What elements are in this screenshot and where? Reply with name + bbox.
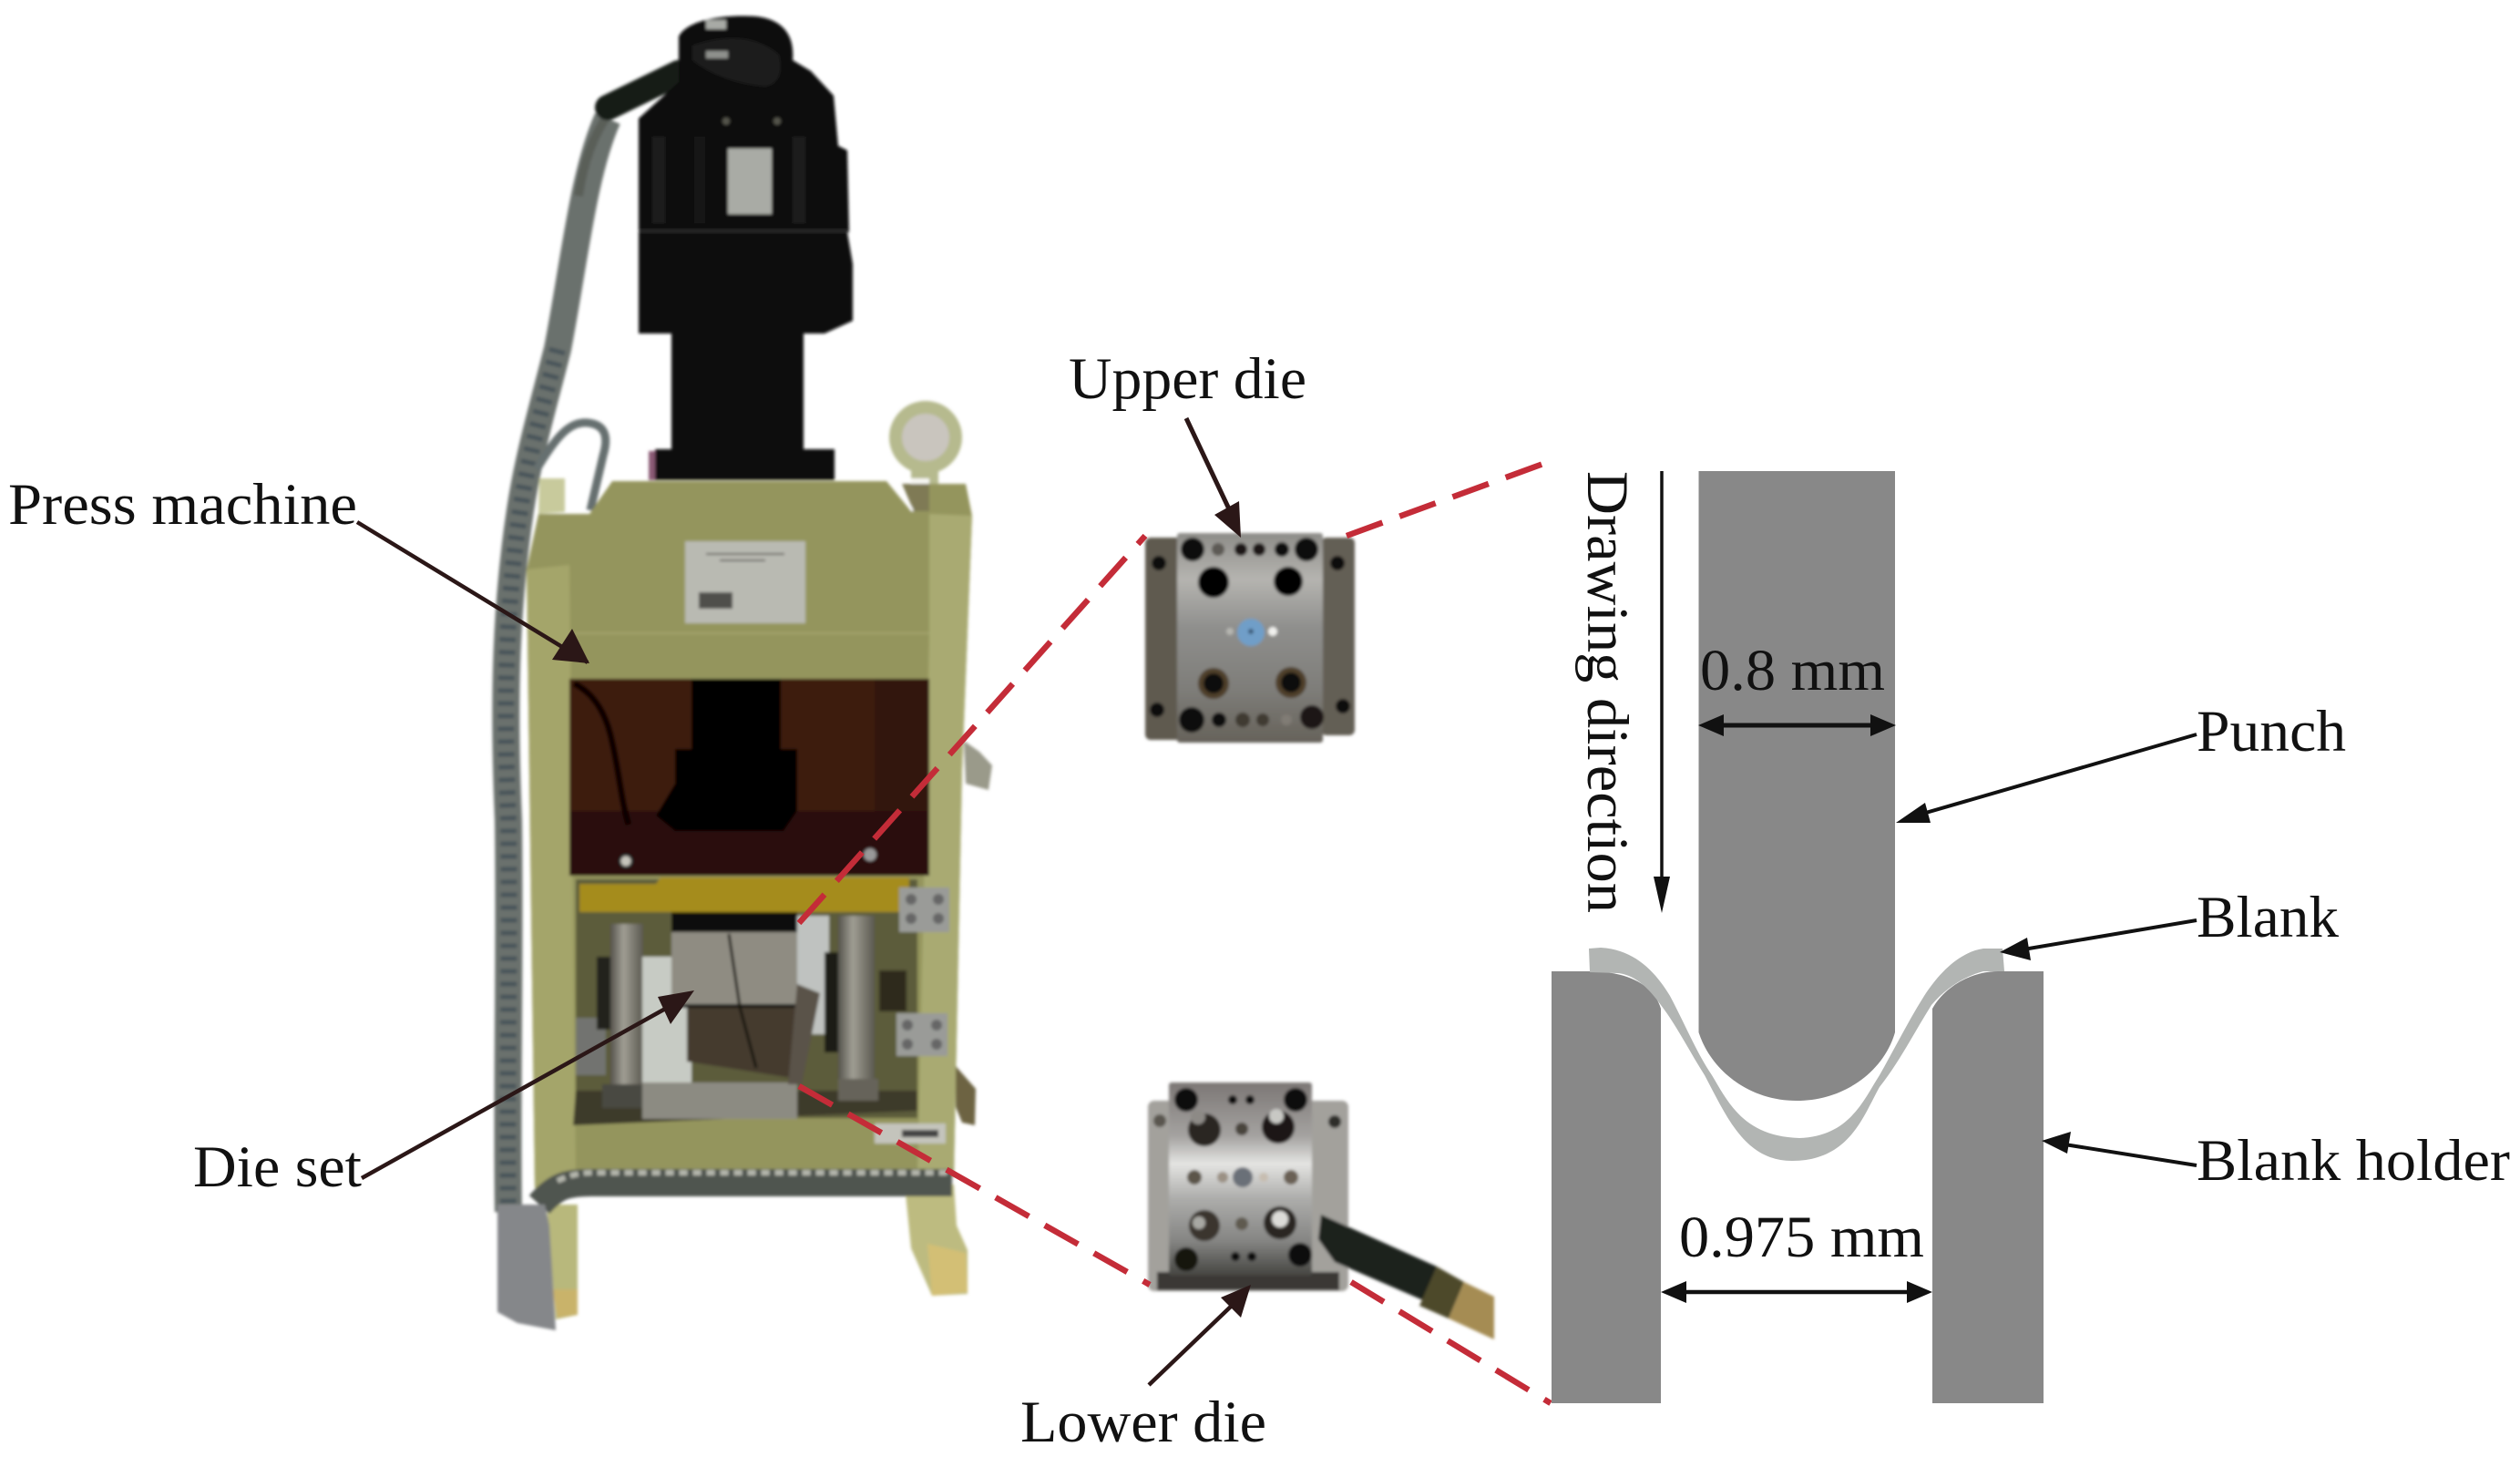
label: press machine: Press machine: [8, 472, 357, 538]
label: lower die: Lower die: [1020, 1390, 1266, 1455]
eye bolt: [896, 407, 956, 503]
arrow head: die set: [658, 990, 694, 1024]
punch: [1698, 471, 1895, 1101]
die set: [671, 912, 838, 1084]
cable: lower conduit: [539, 1173, 952, 1205]
arrow: upper die: [1186, 418, 1232, 515]
arrow: press machine: [357, 522, 588, 662]
photo: upper die: [1145, 533, 1355, 743]
arrow: die set: [362, 999, 683, 1178]
frame legs: [547, 1185, 968, 1319]
label: blank: Blank: [2197, 885, 2340, 950]
press frame: [527, 478, 972, 1188]
dimension arrow: 0.8 mm: [1698, 714, 1896, 736]
label: upper die: Upper die: [1069, 346, 1306, 412]
arrow: blank holder: [2042, 1132, 2197, 1165]
label: punch: Punch: [2197, 699, 2346, 764]
arrow: punch: [1896, 734, 2197, 823]
motor label: [728, 149, 772, 214]
guide columns: [602, 916, 878, 1108]
photo: lower die and hose: [1148, 1082, 1494, 1339]
arrow: blank: [2000, 920, 2197, 960]
clamp brackets: [896, 887, 949, 1056]
cable: grey conduit: [506, 73, 679, 1212]
servo motor: [639, 15, 853, 480]
side fittings: [956, 741, 992, 1125]
blank holder: right: [1932, 971, 2044, 1403]
label: 0.8 mm: 0.8 mm: [1700, 638, 1885, 703]
arrow head: upper die: [1214, 501, 1241, 538]
label: blank holder: Blank holder: [2197, 1128, 2510, 1194]
arrow: lower die: [1149, 1303, 1234, 1385]
duct tape wrap: [497, 1205, 556, 1330]
schematic: forming cross-section: [1552, 471, 2044, 1403]
frame label with barcode: [685, 541, 805, 623]
label: 0.975 mm: 0.975 mm: [1679, 1205, 1924, 1270]
lower opening: [573, 877, 917, 1125]
label: drawing direction: Drawing direction: [1574, 471, 1640, 913]
arrow head: lower die: [1221, 1285, 1251, 1318]
arrow head: press machine: [552, 629, 589, 663]
photo: press machine: [497, 15, 992, 1330]
dimension arrow: 0.975 mm: [1661, 1281, 1932, 1303]
label: die set: Die set: [193, 1134, 362, 1200]
yellow crossbar: [579, 877, 909, 912]
arrow: drawing direction: [1654, 471, 1670, 913]
blank sheet: [1589, 948, 2004, 1161]
window: tinted glass: [569, 679, 929, 876]
hose: [1318, 1215, 1494, 1339]
blank holder: left: [1552, 971, 1661, 1403]
red dashed zoom lines: [799, 461, 1551, 1403]
